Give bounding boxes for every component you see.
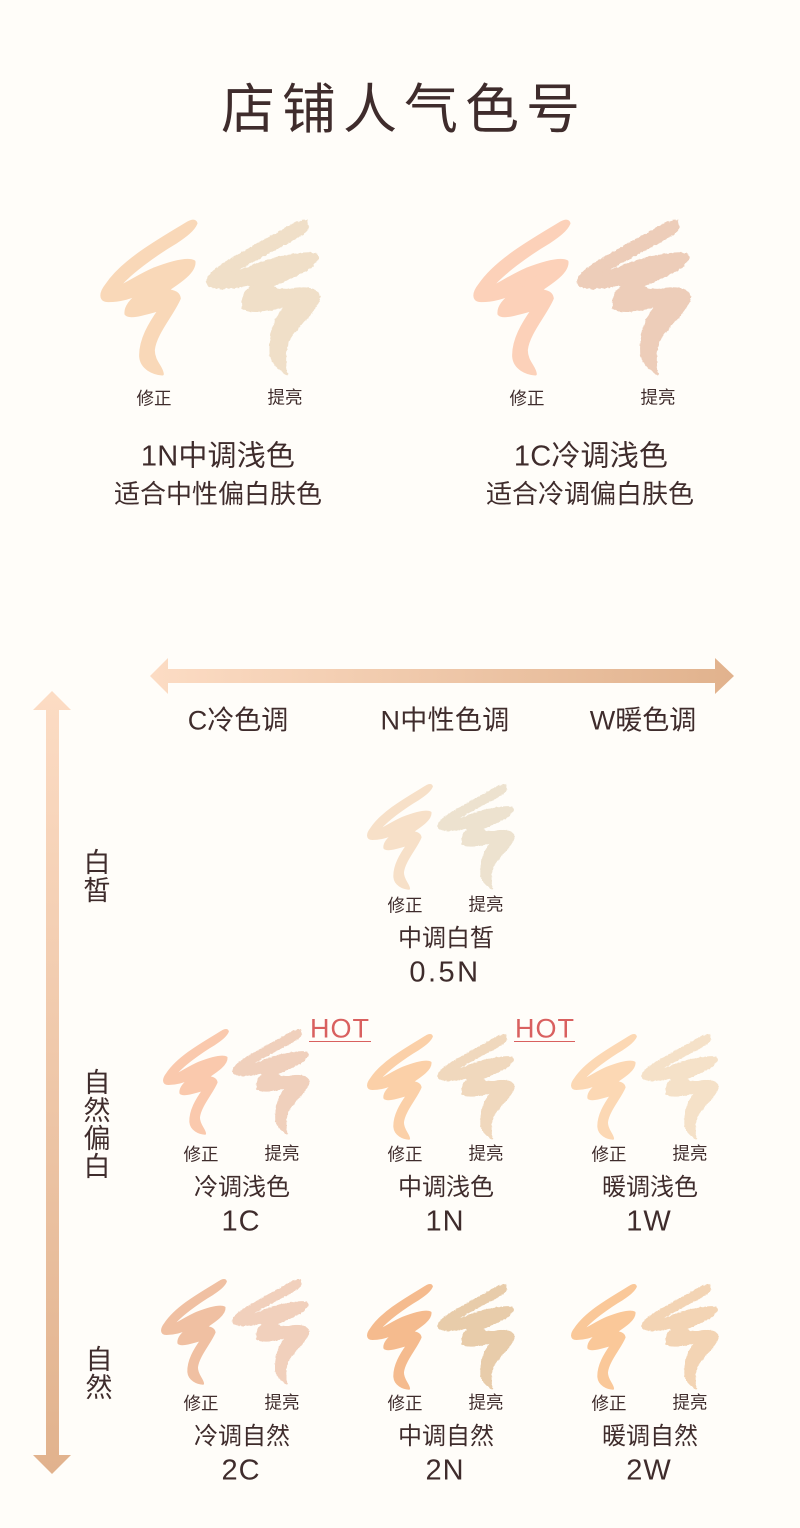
- name: 1C: 冷调浅色: [194, 1174, 290, 1201]
- label: 2C correct: 修正: [184, 1393, 218, 1413]
- axis label: natural: 自: [86, 1345, 112, 1375]
- name: 1N: 中调浅色: [398, 1174, 494, 1201]
- code: 2W: 2W: [626, 1454, 672, 1486]
- code: 2N: 2N: [425, 1454, 465, 1486]
- label: 1N highlight: 提亮: [468, 1143, 504, 1163]
- description: 1C: 适合冷调偏白肤色: [486, 479, 694, 509]
- code: 1W: 1W: [626, 1206, 672, 1238]
- label: 1W correct: 修正: [592, 1144, 626, 1164]
- swatch pair: 1W: [572, 1035, 718, 1139]
- label: 2N highlight: 提亮: [468, 1392, 504, 1412]
- heading: 1N: 1N中调浅色: [141, 440, 295, 472]
- name: 0.5N: 中调白皙: [398, 925, 494, 952]
- swatch pair: 1N: [368, 1035, 514, 1139]
- axis label: cool: C冷色调: [188, 706, 288, 736]
- label: 1C correct: 修正: [184, 1144, 218, 1164]
- swatch pair: 1C large: [475, 221, 690, 374]
- arrow: horizontal colour tone axis: [150, 658, 734, 694]
- swatch pair: 2N: [368, 1285, 514, 1389]
- label: top right correct: 修正: [510, 388, 544, 408]
- description: 1N: 适合中性偏白肤色: [114, 479, 322, 509]
- hot badge: 1N: HOT: [515, 1014, 575, 1044]
- label: top left highlight: 提亮: [268, 387, 302, 407]
- code: 2C: 2C: [221, 1454, 261, 1486]
- swatch pair: 0.5N: [368, 785, 514, 889]
- swatch pair: 2C: [162, 1280, 309, 1384]
- heading: 1C: 1C冷调浅色: [514, 440, 668, 472]
- hot underline: 1C: [309, 1041, 371, 1042]
- axis label: natural fair: 然: [84, 1096, 110, 1126]
- swatch pair: 1C: [164, 1030, 309, 1134]
- label: top left correct: 修正: [136, 388, 172, 408]
- axis label: natural fair: [84, 1068, 110, 1182]
- label: 0.5N correct: 修正: [388, 895, 422, 915]
- axis label: natural fair: 偏: [84, 1124, 110, 1154]
- axis label: fair: 皙: [84, 876, 110, 906]
- code: 1C: 1C: [221, 1206, 261, 1238]
- arrow: vertical depth axis: [33, 691, 71, 1474]
- label: 1N correct: 修正: [388, 1144, 422, 1164]
- axis label: natural fair: 自: [84, 1068, 110, 1098]
- label: 2W correct: 修正: [592, 1393, 626, 1413]
- axis label: natural fair: 白: [84, 1152, 110, 1182]
- axis label: natural: 然: [86, 1373, 112, 1403]
- swatch pair: 2W: [572, 1285, 718, 1389]
- axis label: fair: [84, 848, 110, 906]
- code: 1N: 1N: [425, 1206, 465, 1238]
- title: 店铺人气色号: [221, 80, 587, 140]
- name: 2N: 中调自然: [398, 1423, 494, 1450]
- name: 1W: 暖调浅色: [602, 1174, 698, 1201]
- label: 2C highlight: 提亮: [264, 1392, 300, 1412]
- code: 0.5N: 0.5N: [409, 956, 481, 988]
- axis label: natural: [86, 1345, 112, 1403]
- hot underline: 1N: [514, 1041, 575, 1042]
- name: 2W: 暖调自然: [602, 1423, 698, 1450]
- axis label: fair: 白: [84, 848, 110, 878]
- name: 2C: 冷调自然: [194, 1423, 290, 1450]
- label: 1C highlight: 提亮: [264, 1143, 300, 1163]
- label: 0.5N highlight: 提亮: [468, 894, 504, 914]
- label: 2N correct: 修正: [388, 1393, 422, 1413]
- swatch pair: 1N large: [102, 221, 319, 374]
- hot badge: 1C: HOT: [310, 1014, 370, 1044]
- axis label: neutral: N中性色调: [380, 706, 510, 736]
- label: top right highlight: 提亮: [640, 387, 676, 407]
- label: 1W highlight: 提亮: [672, 1143, 708, 1163]
- label: 2W highlight: 提亮: [672, 1392, 708, 1412]
- axis label: warm: W暖色调: [590, 706, 696, 736]
